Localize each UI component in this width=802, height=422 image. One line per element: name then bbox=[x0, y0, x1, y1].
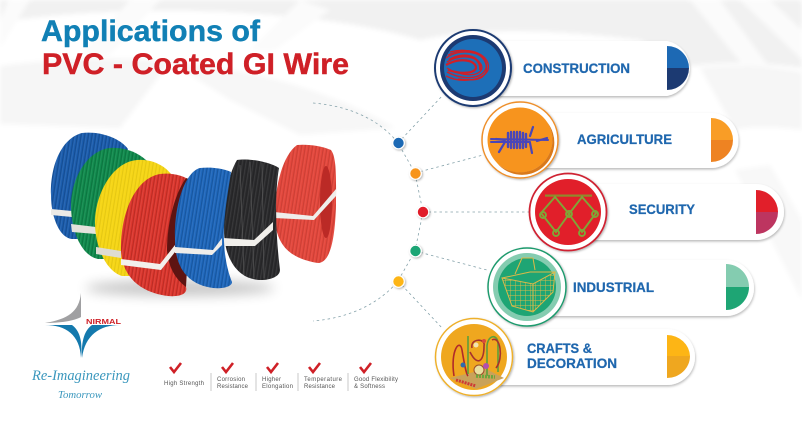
coil: blue front bbox=[175, 168, 232, 288]
coil: black bbox=[223, 159, 280, 280]
card: industrial bbox=[488, 248, 754, 326]
half circle tab bbox=[667, 335, 690, 378]
coil: yellow bbox=[95, 160, 171, 276]
label: CRAFTS & bbox=[527, 341, 592, 356]
feature: corrosion resistance bbox=[217, 363, 249, 390]
title line 2: PVC - Coated GI Wire bbox=[42, 48, 349, 81]
dashed connector arc bbox=[313, 95, 532, 329]
half circle tab bbox=[756, 190, 778, 234]
label: SECURITY bbox=[629, 202, 695, 217]
logo wordmark: NIRMAL bbox=[86, 317, 121, 326]
feature: temperature resistance: Resistance bbox=[304, 384, 336, 390]
card: construction bbox=[435, 30, 690, 106]
feature: good flexibility and softness bbox=[354, 363, 398, 390]
label: INDUSTRIAL bbox=[573, 280, 654, 295]
label: CONSTRUCTION bbox=[523, 61, 630, 76]
pill bbox=[520, 113, 738, 168]
card: crafts and decoration bbox=[436, 318, 695, 396]
feature: high strength: High Strength bbox=[164, 381, 204, 387]
tagline: Tomorrow bbox=[58, 389, 103, 401]
label: AGRICULTURE bbox=[577, 132, 672, 147]
icon: red wire coil bbox=[435, 30, 511, 106]
tagline: Re-Imagineering bbox=[31, 368, 130, 384]
half circle tab bbox=[726, 264, 749, 310]
feature: temperature resistance: Temperature bbox=[304, 377, 343, 383]
pill bbox=[527, 260, 754, 316]
feature: higher elongation: Elongation bbox=[262, 384, 293, 390]
feature: higher elongation bbox=[262, 363, 293, 390]
pill bbox=[568, 184, 784, 240]
feature: good flexibility and softness: & Softness bbox=[354, 384, 385, 390]
pill bbox=[474, 329, 695, 385]
card: agriculture bbox=[482, 102, 738, 178]
feature: good flexibility and softness: Good Flexibility bbox=[354, 377, 398, 383]
half circle tab bbox=[667, 46, 689, 90]
label: DECORATION bbox=[527, 356, 617, 371]
feature: high strength bbox=[164, 363, 204, 387]
feature: higher elongation: Higher bbox=[262, 377, 281, 383]
feature: corrosion resistance: Corrosion bbox=[217, 377, 245, 383]
title line 1: Applications of bbox=[41, 15, 261, 48]
card: security bbox=[530, 174, 784, 250]
coil: light red right bbox=[274, 145, 336, 263]
icon: chain link fence bbox=[530, 174, 606, 250]
label bbox=[527, 341, 617, 371]
logo: Nirmal bbox=[31, 293, 130, 401]
logo mark bbox=[45, 293, 120, 358]
icon: barbed wire bbox=[482, 102, 558, 178]
tagline bbox=[31, 368, 130, 401]
icon: bead toy bbox=[436, 318, 512, 396]
coil: green bbox=[71, 148, 147, 259]
coil: red front bbox=[121, 174, 192, 296]
feature list bbox=[164, 363, 398, 391]
feature: temperature resistance bbox=[304, 363, 343, 390]
feature: corrosion resistance: Resistance bbox=[217, 384, 249, 390]
icon: wire basket bbox=[488, 248, 566, 326]
product image: coloured wire coils bbox=[51, 133, 336, 296]
node dots bbox=[393, 137, 429, 287]
coil: blue back bbox=[51, 133, 128, 239]
pill bbox=[473, 41, 690, 96]
half circle tab bbox=[711, 118, 733, 162]
